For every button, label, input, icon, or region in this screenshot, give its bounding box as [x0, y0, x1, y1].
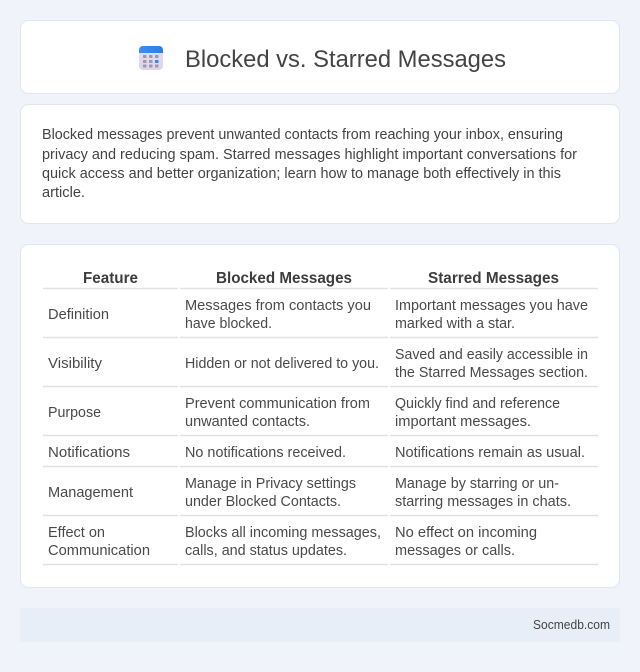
- row: notifications: Notifications remain as usual.: [395, 445, 585, 461]
- row: purpose: unwanted contacts.: [185, 414, 310, 430]
- title: Blocked vs. Starred Messages: [185, 46, 506, 73]
- row: visibility: [43, 347, 598, 386]
- footer: [20, 608, 620, 642]
- row: management: [43, 476, 598, 516]
- icon: calendar: [139, 46, 163, 70]
- row: management: Manage by starring or un-: [395, 476, 559, 492]
- row: definition: Important messages you have: [395, 298, 588, 314]
- row: purpose: Quickly find and reference: [395, 396, 560, 412]
- text block: introduction: privacy and reducing spam. Starred messages highlight important conversations for: [42, 147, 577, 163]
- row: purpose: Purpose: [48, 405, 101, 421]
- row: definition: have blocked.: [185, 316, 272, 332]
- row: definition: [43, 298, 598, 338]
- footer credit: Socmedb.com: [533, 618, 610, 632]
- row: definition: Messages from contacts you: [185, 298, 371, 314]
- text block: introduction: quick access and better organization; learn how to manage both effectively in this: [42, 166, 561, 182]
- table header: Feature: [83, 270, 138, 287]
- row: effect on communication: Effect on: [48, 525, 105, 541]
- row: notifications: No notifications received.: [185, 445, 346, 461]
- panel: comparison table: [20, 244, 620, 588]
- row: definition: marked with a star.: [395, 316, 515, 332]
- text block: introduction: article.: [42, 185, 85, 201]
- row: management: starring messages in chats.: [395, 494, 571, 510]
- row: visibility: Saved and easily accessible in: [395, 347, 588, 363]
- table header: Blocked Messages: [216, 270, 352, 287]
- row: effect on communication: Communication: [48, 543, 150, 559]
- row: visibility: Hidden or not delivered to you.: [185, 356, 379, 372]
- text block: introduction: [42, 127, 577, 201]
- row: purpose: Prevent communication from: [185, 396, 370, 412]
- row: notifications: [43, 445, 598, 466]
- row: visibility: the Starred Messages section.: [395, 365, 588, 381]
- row: effect on communication: [43, 525, 598, 564]
- row: effect on communication: No effect on incoming: [395, 525, 537, 541]
- panel: title card: [20, 20, 620, 94]
- table header: [43, 270, 598, 288]
- table header: Starred Messages: [428, 270, 559, 287]
- row: purpose: [43, 396, 598, 436]
- panel: introduction: [20, 104, 620, 224]
- row: visibility: Visibility: [48, 356, 103, 372]
- row: definition: Definition: [48, 307, 109, 323]
- text block: introduction: Blocked messages prevent unwanted contacts from reaching your inbox, ensuring: [42, 127, 563, 143]
- row: effect on communication: messages or calls.: [395, 543, 515, 559]
- row: effect on communication: calls, and status updates.: [185, 543, 347, 559]
- row: management: Manage in Privacy settings: [185, 476, 356, 492]
- row: management: Management: [48, 485, 133, 501]
- row: effect on communication: Blocks all incoming messages,: [185, 525, 381, 541]
- row: management: under Blocked Contacts.: [185, 494, 341, 510]
- row: notifications: Notifications: [48, 445, 130, 461]
- row: purpose: important messages.: [395, 414, 531, 430]
